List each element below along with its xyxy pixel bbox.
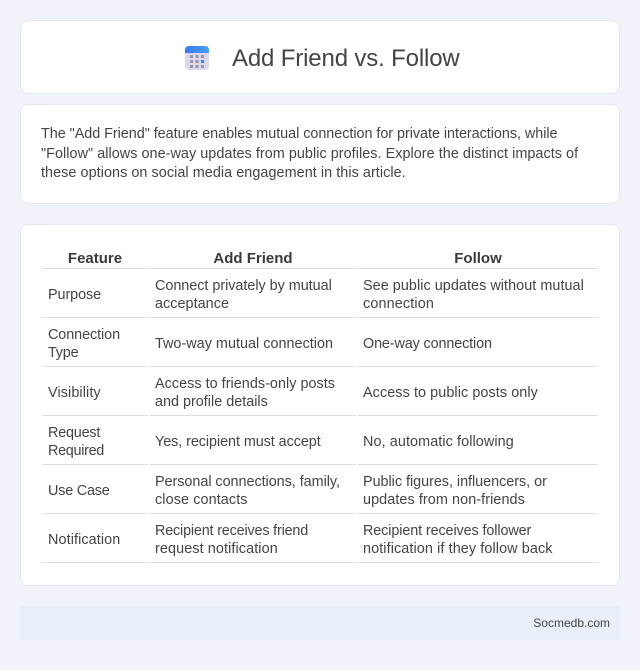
table header: Follow: Follow xyxy=(454,250,502,267)
cell: acceptance xyxy=(155,296,229,312)
text block: introduction xyxy=(41,126,578,181)
cell: close contacts xyxy=(155,492,248,508)
table: comparison xyxy=(42,268,598,563)
panel: comparison table xyxy=(20,224,620,586)
cell: request notification xyxy=(155,541,278,557)
cell: Recipient receives friend xyxy=(155,523,308,539)
cell: Two-way mutual connection xyxy=(155,336,333,352)
text block: introduction: these options on social media engagement in this article. xyxy=(41,165,406,181)
cell: Yes, recipient must accept xyxy=(155,434,321,450)
cell: Recipient receives follower xyxy=(363,523,531,539)
row label: Purpose: Purpose xyxy=(48,287,101,303)
text block: introduction: The "Add Friend" feature enables mutual connection for private interactions, while xyxy=(41,126,558,142)
cell: Personal connections, family, xyxy=(155,474,340,490)
cell: updates from non-friends xyxy=(363,492,525,508)
row label: Use Case: Use Case xyxy=(48,483,110,499)
row label: Notification: Notification xyxy=(48,532,120,548)
title: Add Friend vs. Follow xyxy=(232,45,460,72)
cell xyxy=(155,376,335,410)
cell xyxy=(363,523,553,557)
cell xyxy=(155,278,332,312)
text block: introduction: "Follow" allows one-way updates from public profiles. Explore the distinct impacts of xyxy=(41,146,578,162)
cell xyxy=(363,474,547,508)
cell xyxy=(363,278,584,312)
row label: Request Required: Request xyxy=(48,425,100,441)
cell: No, automatic following xyxy=(363,434,514,450)
row label: Request Required xyxy=(48,425,104,459)
cell: connection xyxy=(363,296,434,312)
table header: Add Friend: Add Friend xyxy=(213,250,293,267)
cell: Access to public posts only xyxy=(363,385,538,401)
panel: introduction xyxy=(20,104,620,204)
cell: Access to friends-only posts xyxy=(155,376,335,392)
cell: and profile details xyxy=(155,394,268,410)
cell xyxy=(155,523,308,557)
footer bar xyxy=(20,606,620,640)
row label: Connection Type xyxy=(48,327,120,361)
cell: One-way connection xyxy=(363,336,492,352)
cell: See public updates without mutual xyxy=(363,278,584,294)
footer text: Socmedb.com xyxy=(533,616,610,630)
cell: notification if they follow back xyxy=(363,541,553,557)
cell xyxy=(155,474,340,508)
cell: Connect privately by mutual xyxy=(155,278,332,294)
row label: Connection Type: Type xyxy=(48,345,78,361)
cell: Public figures, influencers, or xyxy=(363,474,547,490)
table header: Feature: Feature xyxy=(68,250,122,267)
icon: calendar xyxy=(185,46,209,70)
row label: Request Required: Required xyxy=(48,443,104,459)
row label: Visibility: Visibility xyxy=(48,385,101,401)
panel: title header xyxy=(20,20,620,94)
row label: Connection Type: Connection xyxy=(48,327,120,343)
